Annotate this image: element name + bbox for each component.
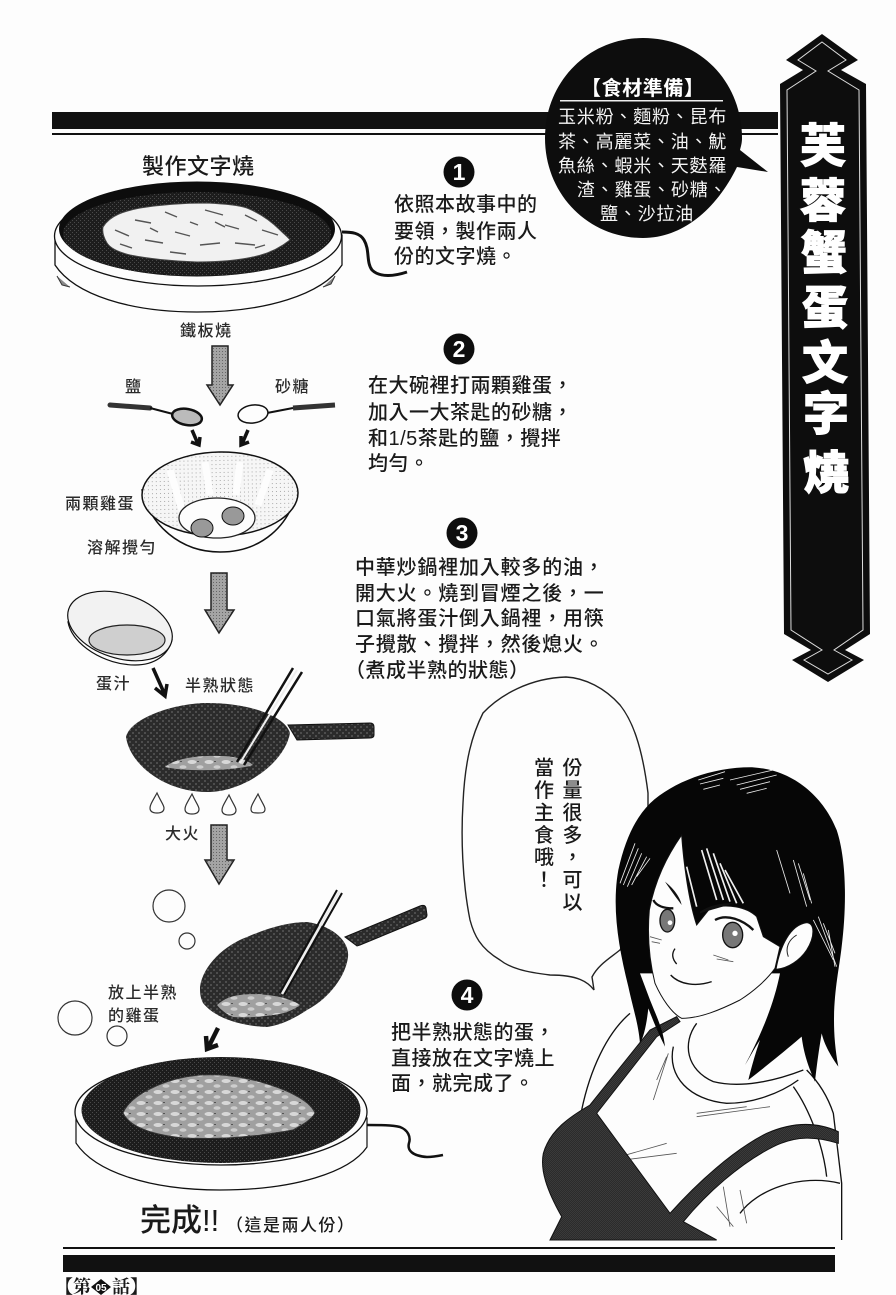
bubble text: 當作主食哦！ (530, 757, 554, 891)
step 2 text: 加入一大茶匙的砂糖， (368, 401, 573, 424)
title text: 蟹 (801, 227, 847, 279)
step 2 text (368, 374, 573, 475)
panel: ingredients bubble (545, 38, 768, 238)
step 4 number (452, 980, 482, 1010)
step 2 number (444, 334, 474, 364)
arrow 3 (205, 825, 234, 884)
hair back (616, 767, 845, 1082)
ingredients list: 鹽、沙拉油 (600, 204, 694, 224)
step 3 text: 開大火。燒到冒煙之後，一 (355, 582, 605, 605)
step 3 text: 中華炒鍋裡加入較多的油， (355, 556, 605, 579)
title text: 芙 (800, 120, 846, 172)
step 4 text: 面，就完成了。 (391, 1072, 534, 1095)
ingredients list: 渣、雞蛋、砂糖、 (577, 180, 727, 200)
panel: title banner (780, 34, 870, 682)
blush (650, 937, 733, 962)
step 1 text (394, 193, 538, 268)
arrow: salt into bowl (191, 430, 200, 445)
icon: wok 1 (126, 668, 374, 792)
bubble text (530, 757, 582, 914)
collar lines (672, 1023, 840, 1213)
title text (800, 120, 849, 499)
step 4 text: 把半熟狀態的蛋， (391, 1021, 555, 1044)
eyes (660, 909, 675, 932)
step 2 text: 在大碗裡打兩顆雞蛋， (368, 374, 573, 397)
step 4 text: 直接放在文字燒上 (391, 1047, 555, 1070)
step 1 number: 1 (453, 159, 466, 185)
bottom rule (63, 1247, 835, 1272)
step 1 text: 要領，製作兩人 (394, 220, 538, 243)
fold lines (620, 1053, 770, 1227)
title text: 字 (803, 388, 849, 440)
icon: griddle top (54, 182, 407, 312)
serving note: （這是兩人份） (226, 1215, 356, 1235)
step 4 text (391, 1021, 555, 1095)
title text: 文 (802, 337, 848, 389)
step 3 text: 子攪散、攪拌，然後熄火。 (355, 632, 605, 656)
ingredients list: 魚絲、蝦米、天麩羅 (558, 156, 727, 176)
nose and mouth (671, 949, 712, 984)
label: mix: 溶解攪勻 (87, 539, 157, 557)
icon: wok 2 (200, 890, 427, 1027)
label: high heat: 大火 (165, 825, 200, 843)
step 1 text: 份的文字燒。 (394, 245, 517, 268)
title text: 燒 (803, 447, 849, 499)
bubble text: 份量很多，可以 (559, 757, 582, 914)
icon: small bowl (59, 579, 181, 673)
icon: salt spoon (110, 405, 203, 427)
top rule (52, 112, 778, 135)
label: griddle: 鐵板燒 (180, 322, 233, 340)
ingredients list: 茶、高麗菜、油、魷 (558, 132, 727, 152)
eyebrows (665, 882, 733, 913)
character illustration (542, 767, 845, 1240)
speech bubble (462, 677, 648, 990)
icon: griddle finished (75, 1057, 443, 1190)
step 3 number (446, 518, 478, 548)
body: shirt (543, 1013, 842, 1240)
step 2 number: 2 (453, 336, 465, 362)
step 2 text: 和1/5茶匙的鹽，攪拌 (368, 427, 561, 450)
ingredients heading: 【食材準備】 (581, 76, 705, 100)
apron (542, 1017, 838, 1240)
icon: flames (150, 793, 265, 815)
chapter number badge: 05 (95, 1283, 107, 1294)
shirt outline (582, 1013, 842, 1240)
label: salt: 鹽 (125, 378, 143, 396)
arrow 2 (205, 573, 234, 633)
step 1 text: 依照本故事中的 (394, 193, 538, 216)
ingredients list: 玉米粉、麵粉、昆布 (558, 107, 727, 127)
icon: sugar spoon (237, 403, 335, 425)
face (648, 835, 780, 1018)
done heading (140, 1203, 356, 1238)
step 2 text: 均勻。 (368, 452, 430, 475)
step 3 number: 3 (456, 520, 468, 546)
label: place half cooked egg: 放上半熟 (108, 983, 178, 1002)
arrow 1 (207, 346, 233, 405)
finished griddle food (123, 1075, 315, 1139)
title text: 蓉 (800, 175, 846, 227)
done heading: 完成!! (140, 1203, 219, 1238)
label: two eggs: 兩顆雞蛋 (65, 495, 135, 513)
title text: 蛋 (802, 282, 848, 334)
label: place half cooked egg (108, 983, 178, 1025)
arrow: sugar into bowl (241, 430, 249, 445)
label: half cooked: 半熟狀態 (185, 676, 255, 695)
label: place half cooked egg: 的雞蛋 (108, 1007, 161, 1025)
ingredients list (558, 107, 727, 224)
icon: steam (58, 890, 195, 1046)
step 3 text (345, 556, 605, 682)
chapter label (55, 1276, 148, 1295)
hair highlights (620, 770, 837, 967)
icon: mixing bowl (141, 451, 299, 552)
step 3 text: 口氣將蛋汁倒入鍋裡，用筷 (355, 607, 605, 630)
step 3 text: （煮成半熟的狀態） (345, 659, 530, 682)
step 4 number: 4 (461, 982, 474, 1008)
fringe highlights (687, 848, 743, 907)
heading: make monjayaki: 製作文字燒 (142, 154, 255, 179)
step 1 number (444, 156, 474, 188)
arrow: place on griddle (206, 1028, 218, 1049)
label: egg liquid: 蛋汁 (96, 675, 131, 693)
top griddle food (103, 203, 290, 262)
label: sugar: 砂糖 (275, 378, 310, 396)
ear (776, 923, 813, 969)
arrow: pour (153, 668, 167, 696)
